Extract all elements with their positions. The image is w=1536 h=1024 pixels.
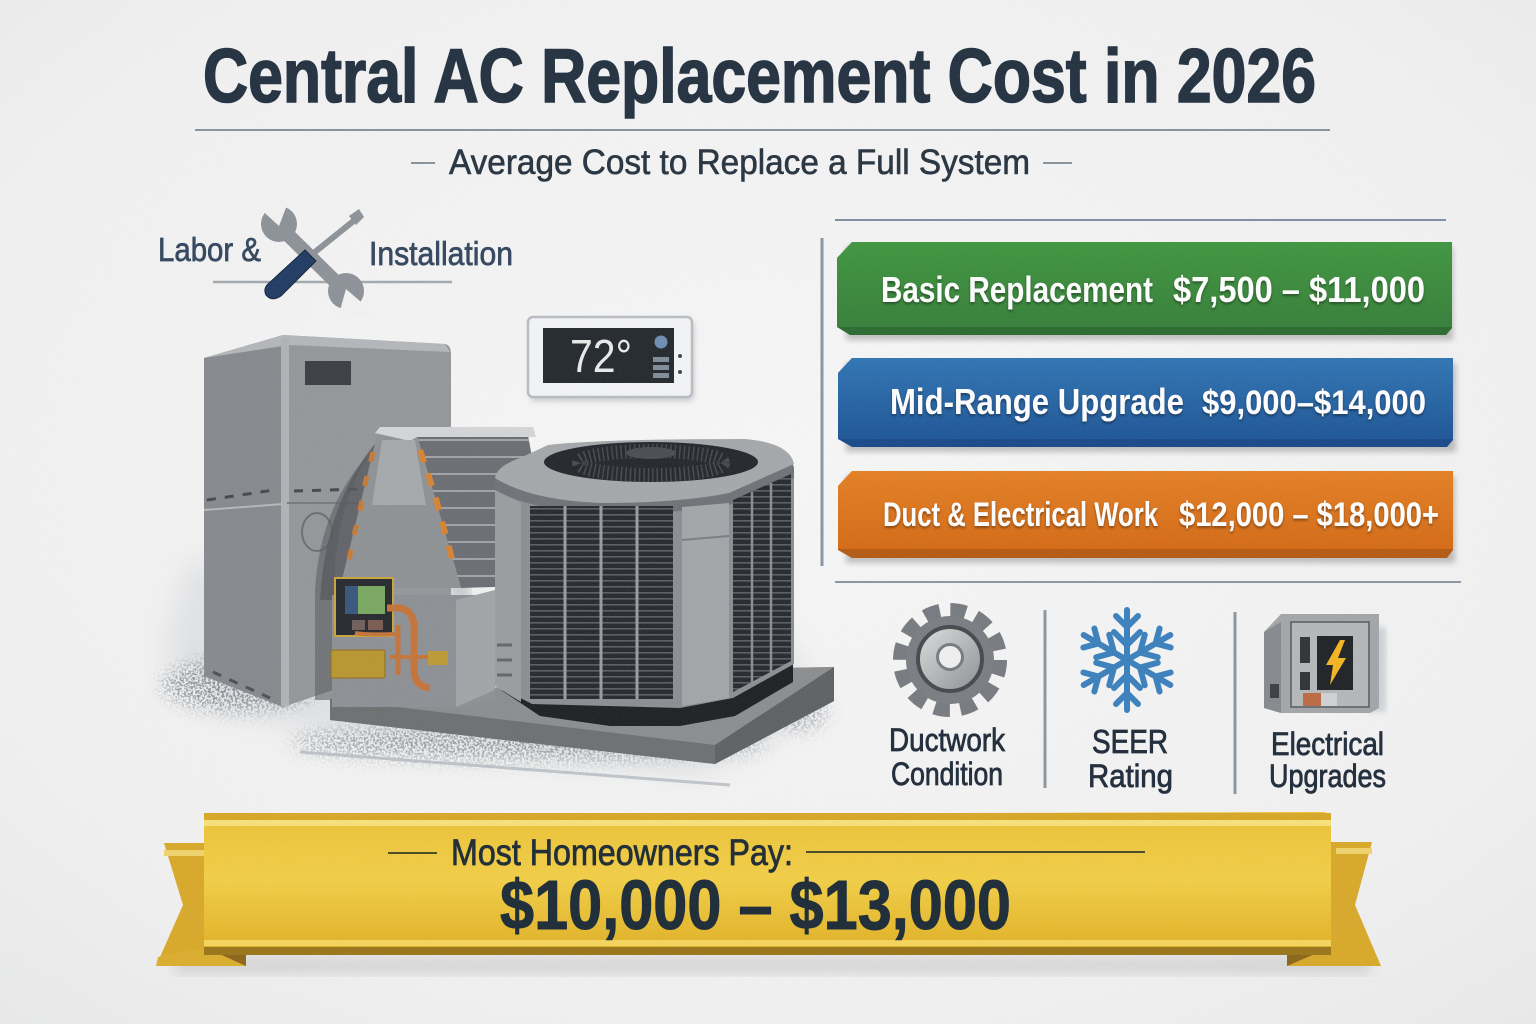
tier: mid-range upgrade [838, 358, 1456, 452]
factor: ductwork condition: Condition [891, 756, 1003, 792]
indoor coil [331, 427, 555, 707]
tier: basic replacement: Basic Replacement [881, 269, 1153, 310]
icon: crossed wrench and screwdriver [254, 191, 375, 326]
ribbon right tail [1287, 842, 1381, 966]
tier: duct and electrical work [838, 471, 1455, 563]
condenser lid [495, 441, 794, 513]
panel: price tiers [837, 242, 1456, 563]
label text: Labor &: Labor & [158, 231, 261, 268]
panel: cost factors [889, 610, 1386, 794]
panel frame lines [822, 220, 1461, 582]
factor: electrical upgrades: Upgrades [1269, 758, 1386, 794]
icon: gear [902, 612, 998, 708]
subtitle: Average Cost to Replace a Full System [449, 143, 1030, 182]
copper pipes [355, 608, 430, 688]
condenser base [501, 655, 793, 726]
tier: mid-range upgrade: Mid-Range Upgrade [890, 381, 1184, 422]
tier: mid-range upgrade: $9,000–$14,000 [1202, 384, 1426, 422]
control board [335, 578, 393, 636]
banner: most homeowners pay [156, 812, 1381, 975]
brass valves [331, 650, 448, 678]
factor: ductwork condition: Ductwork [889, 722, 1006, 758]
ribbon main [204, 812, 1331, 947]
factor: ductwork condition [889, 612, 1006, 792]
tier: duct and electrical work: Duct & Electrical Work [883, 496, 1158, 534]
tier: basic replacement [837, 242, 1453, 340]
front louvers [530, 506, 673, 699]
tier: duct and electrical work: $12,000 – $18,000+ [1179, 496, 1439, 534]
outdoor condenser unit [495, 439, 794, 726]
factor: SEER rating: SEER [1092, 723, 1168, 760]
fan grille [544, 442, 758, 482]
factor: electrical upgrades [1264, 614, 1386, 794]
condenser body [495, 468, 794, 708]
thermostat [528, 317, 694, 401]
furnace cabinet [204, 335, 451, 707]
factor: electrical upgrades: Electrical [1271, 726, 1384, 762]
factor: SEER rating [1077, 610, 1177, 794]
title: Central AC Replacement Cost in 2026 [203, 34, 1316, 119]
banner label: Most Homeowners Pay: [451, 832, 793, 873]
concrete pad [330, 667, 834, 764]
labor and installation label [158, 191, 513, 326]
factor: SEER rating: Rating [1088, 758, 1173, 794]
icon: electrical panel [1264, 614, 1386, 713]
icon: snowflake [1077, 610, 1177, 710]
thermostat: 72° [570, 330, 632, 382]
tier: basic replacement: $7,500 – $11,000 [1173, 269, 1425, 310]
banner price: $10,000 – $13,000 [500, 866, 1011, 944]
ground splatter [162, 560, 826, 775]
side louvers [733, 474, 791, 692]
illustration: central AC system [162, 335, 834, 785]
ribbon left tail [156, 843, 210, 966]
label text: Installation: Installation [369, 235, 513, 272]
